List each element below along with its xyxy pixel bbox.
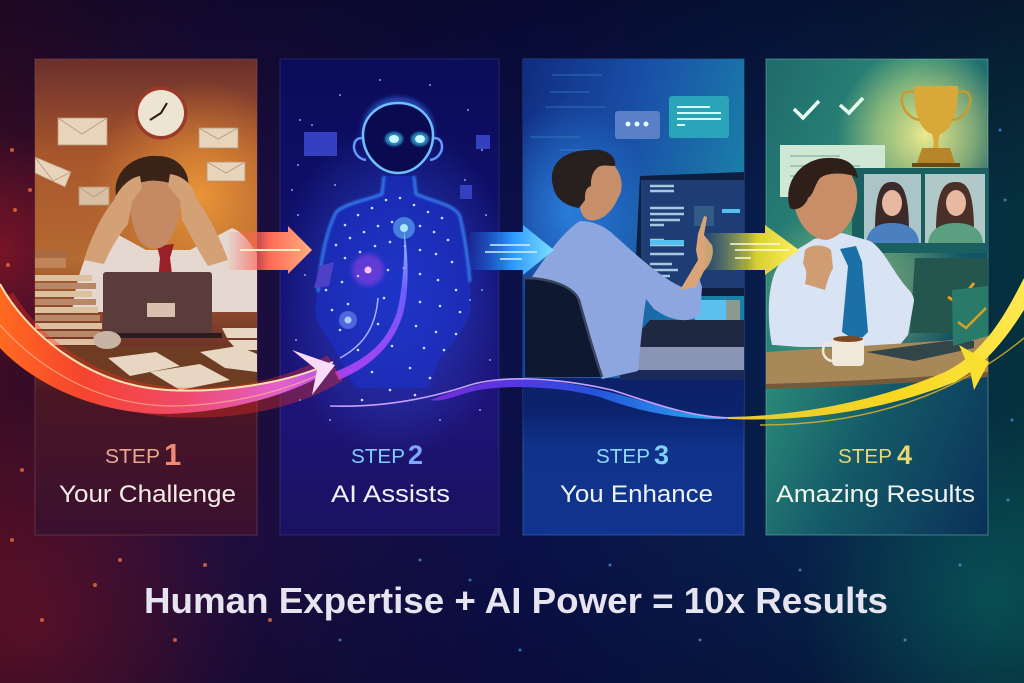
arrowhead: ribbon end [959, 345, 989, 390]
step 1 label: Your Challenge [59, 481, 236, 508]
sparkle body [292, 80, 490, 420]
video call tiles [852, 168, 988, 253]
icon: gold trophy [902, 86, 970, 167]
monitor [634, 172, 744, 296]
paper stack [35, 250, 102, 345]
step 4 label: Amazing Results [776, 481, 975, 508]
step 4 label [776, 440, 975, 508]
office desk, keyboard, second screen [620, 300, 744, 380]
step 3 label [560, 440, 713, 508]
icon: wall clock [134, 86, 188, 140]
scattered papers on desk [60, 328, 257, 394]
flowing ribbon: yellow [728, 278, 1024, 425]
panel 1: your challenge [34, 58, 258, 536]
office chair [525, 278, 602, 377]
arrowhead: ribbon [292, 350, 335, 395]
purple ribbon rising through body [335, 230, 408, 380]
panel 2: AI assists [275, 59, 515, 535]
step 2 label [331, 440, 450, 508]
step 4 label: STEP [838, 446, 892, 468]
step 3 label: STEP [596, 446, 650, 468]
laptop [103, 272, 222, 338]
panel 4: amazing results [766, 58, 988, 536]
flowing ribbon: red to purple [0, 284, 335, 414]
document panel [780, 145, 885, 197]
icons: envelopes [35, 118, 245, 205]
step 3 label: You Enhance [560, 481, 713, 508]
checkmark badges [794, 98, 863, 118]
step 4 label: 4 [897, 440, 912, 470]
icon: glowing AI robot head [354, 97, 442, 173]
step 1 label: STEP [105, 446, 160, 468]
step 2 label: AI Assists [331, 481, 450, 508]
arrow: step 1 to step 2 [227, 226, 312, 274]
flowing ribbon: purple to blue [330, 378, 735, 419]
monitor [910, 258, 988, 333]
step 3 label: 3 [654, 440, 669, 470]
floating UI cards [615, 96, 729, 139]
step 2 label: 2 [408, 440, 423, 470]
step 1 label: 1 [164, 437, 181, 472]
step 1 label [59, 437, 236, 508]
laptop [866, 286, 988, 361]
tagline: Human Expertise + AI Power = 10x Results [144, 580, 888, 621]
person: stressed man [72, 156, 277, 312]
desk and coffee cup [766, 332, 988, 389]
step 2 label: STEP [351, 446, 405, 468]
person: man pointing at screen [532, 150, 713, 379]
arrow: step 2 to step 3 [470, 225, 554, 275]
arrow: step 3 to step 4 [705, 225, 799, 275]
panel 3: you enhance [522, 58, 744, 536]
person: celebrating man [769, 158, 914, 347]
